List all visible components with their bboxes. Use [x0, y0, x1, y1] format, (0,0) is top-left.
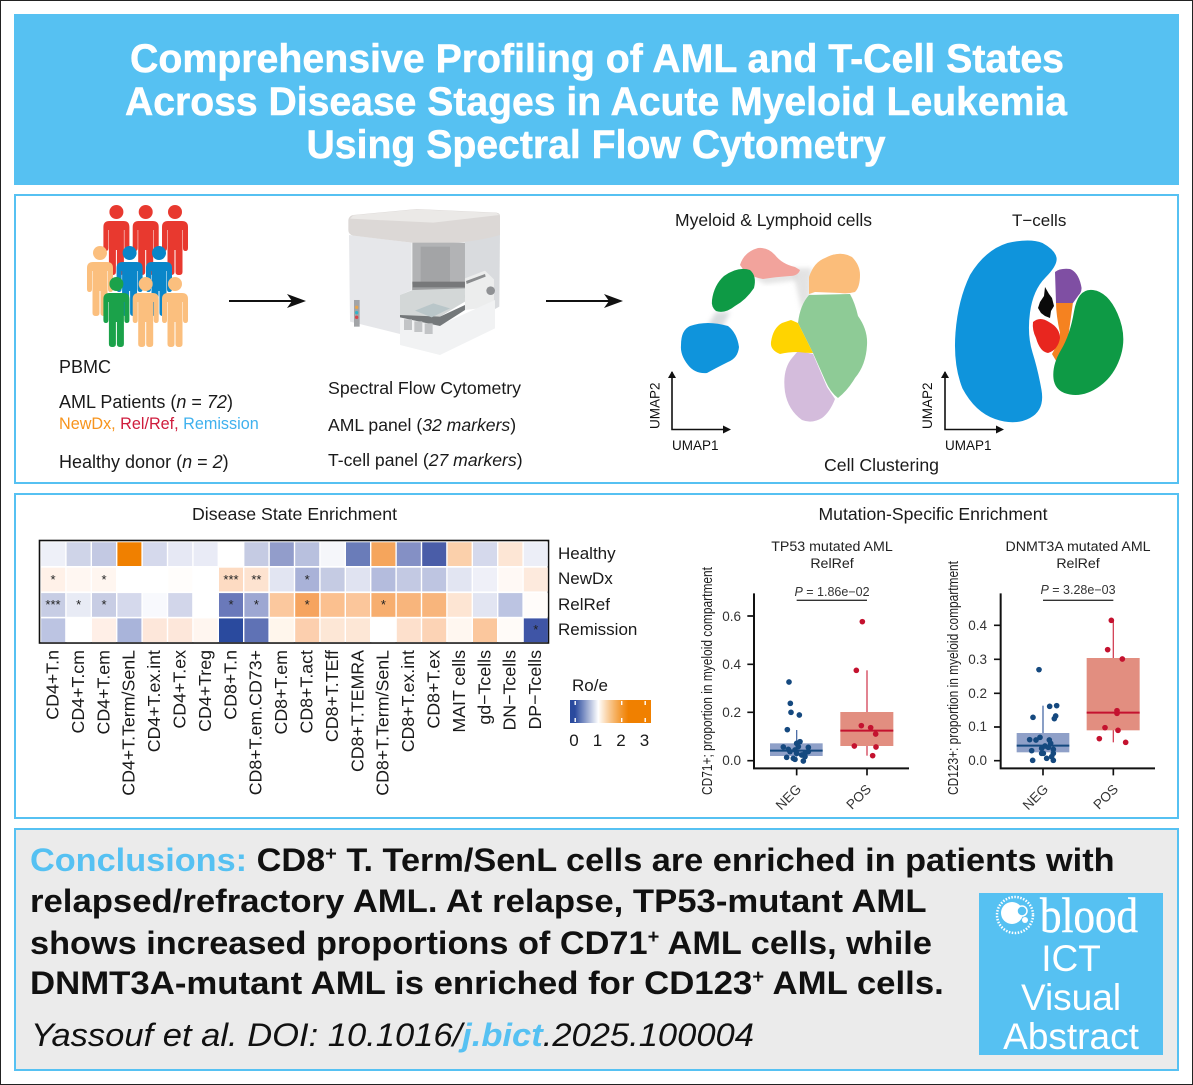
chart: TP53 box plot: 0.2 [722, 705, 741, 720]
column labels: CD4+T.ex.int [144, 650, 164, 752]
text: conclusions: AML cells, while [659, 926, 932, 962]
icon: patient group [87, 205, 188, 347]
text: conclusions [30, 843, 1115, 1002]
legend: Ro/e colour scale: 0 [569, 731, 579, 750]
chart: DNMT3A box plot: P = 3.28e−03 [1040, 583, 1116, 597]
arrow: patients to cytometer [229, 294, 306, 308]
title banner [14, 14, 1179, 185]
text: cytometry panels: AML panel (32 markers) [328, 415, 516, 435]
title banner: Across Disease Stages in Acute Myeloid Leukemia [125, 80, 1068, 124]
column labels: CD8+T.Term/SenL [373, 650, 393, 796]
panel: enrichment analyses [15, 494, 1178, 818]
chart: DNMT3A box plot [945, 539, 1155, 813]
significance stars: * [381, 597, 386, 612]
text: conclusions: DNMT3A-mutant AML is enriched for CD123 [30, 966, 752, 1002]
logo: blood ICT visual abstract: Visual [1021, 977, 1121, 1018]
column labels: CD8+T.TEff [322, 650, 342, 742]
chart: DNMT3A box plot: 0.3 [968, 652, 987, 667]
significance stars: * [76, 597, 81, 612]
column labels: gd−Tcells [474, 650, 494, 725]
column labels: CD8+T.n [220, 650, 240, 720]
text: sample description: PBMC [59, 357, 111, 377]
chart: TP53 box plot: POS [843, 782, 874, 812]
significance stars: * [50, 572, 56, 587]
column labels: CD4+T.ex [170, 650, 190, 729]
legend: Ro/e colour scale: 2 [616, 731, 626, 750]
text: cytometry panels: Spectral Flow Cytometry [328, 378, 521, 398]
chart: T-cells UMAP [955, 240, 1123, 422]
chart: DNMT3A box plot: DNMT3A mutated AML [1005, 539, 1151, 555]
axes: myeloid UMAP: UMAP2 [648, 382, 662, 429]
column labels [42, 650, 545, 796]
column labels: CD4+Treg [195, 650, 215, 732]
significance stars: ** [251, 572, 261, 587]
axes: myeloid UMAP: UMAP1 [672, 438, 719, 453]
column labels: MAIT cells [449, 650, 469, 733]
chart: TP53 box plot: NEG [773, 782, 804, 813]
heading: T-cells UMAP: T−cells [1012, 211, 1066, 230]
significance stars: *** [223, 572, 239, 587]
significance stars: * [254, 597, 259, 612]
chart: TP53 box plot: CD71+; proportion in myeloid compartment [699, 566, 716, 795]
text: citation: Yassouf et al. DOI: 10.1016/j.bict.2025.100004 [31, 1018, 754, 1054]
significance stars: * [533, 622, 538, 637]
text: cytometry panels: T-cell panel (27 markers) [328, 450, 523, 470]
text: cytometry panels [328, 378, 523, 470]
significance stars: * [101, 572, 107, 587]
row labels: Healthy [558, 544, 616, 563]
heading: myeloid and lymphoid UMAP: Myeloid & Lymphoid cells [675, 210, 872, 230]
text: sample description: AML Patients (n = 72) [59, 392, 233, 412]
icon: society seal [997, 897, 1033, 933]
column labels: CD4+T.cm [68, 650, 88, 734]
column labels: CD4+T.n [42, 650, 62, 720]
chart: TP53 box plot: P = 1.86e−02 [794, 585, 870, 599]
row labels [558, 544, 637, 639]
chart: heatmap [40, 540, 548, 643]
chart: TP53 box plot: TP53 mutated AML [771, 539, 893, 555]
title banner: Comprehensive Profiling of AML and T-Cell States [130, 37, 1064, 81]
legend: Ro/e colour scale [569, 676, 651, 750]
text: conclusions: T. Term/SenL cells are enriched in patients with [337, 843, 1115, 879]
text: conclusions: + [648, 926, 659, 948]
column labels: CD8+T.em [271, 650, 291, 734]
legend: Ro/e colour scale: 3 [640, 731, 649, 750]
axes: T-cells UMAP [920, 371, 1004, 453]
significance stars [45, 572, 538, 637]
column labels: CD8+T.act [296, 650, 316, 734]
significance stars: * [305, 572, 310, 587]
axes: T-cells UMAP: UMAP1 [945, 438, 992, 453]
chart: DNMT3A box plot: 0.4 [968, 618, 987, 633]
row labels: Remission [558, 620, 637, 639]
text: conclusions: AML cells. [764, 966, 944, 1002]
text: conclusions: Conclusions: CD8 [30, 843, 325, 879]
chart: DNMT3A box plot: POS [1090, 782, 1121, 812]
chart: TP53 box plot: RelRef [810, 556, 854, 572]
axes: myeloid UMAP [648, 371, 731, 453]
chart: DNMT3A box plot: 0.2 [968, 686, 987, 701]
panel: workflow and cell clustering [15, 195, 1178, 483]
significance stars: * [101, 597, 107, 612]
text: sample description: Healthy donor (n = 2) [59, 452, 229, 472]
chart: DNMT3A box plot: NEG [1020, 782, 1051, 813]
heading: disease state enrichment: Disease State Enrichment [192, 504, 397, 524]
chart: TP53 box plot: 0.4 [722, 657, 741, 672]
text: conclusions: shows increased proportions of CD71 [30, 926, 648, 962]
column labels: DN−Tcells [500, 650, 520, 731]
legend: Ro/e colour scale: Ro/e [572, 676, 608, 695]
caption: cell clustering: Cell Clustering [824, 455, 939, 475]
text: sample description [59, 357, 259, 472]
chart: myeloid and lymphoid UMAP [681, 248, 867, 422]
title banner: Using Spectral Flow Cytometry [306, 123, 886, 167]
chart: TP53 box plot: 0.0 [722, 753, 741, 768]
chart: DNMT3A box plot: 0.1 [968, 719, 987, 734]
text: sample description: NewDx, Rel/Ref, Remission [59, 415, 259, 433]
panel: conclusions [15, 829, 1178, 1070]
significance stars: *** [45, 597, 61, 612]
row labels: NewDx [558, 569, 613, 588]
column labels: CD8+T.em.CD73+ [246, 650, 266, 795]
axes: T-cells UMAP: UMAP2 [920, 382, 935, 429]
icon: spectral flow cytometer [348, 209, 500, 355]
chart: DNMT3A box plot: RelRef [1056, 556, 1100, 572]
arrow: cytometer to clustering [546, 294, 623, 308]
logo: blood ICT visual abstract: Abstract [1003, 1016, 1140, 1057]
chart: TP53 box plot: 0.6 [722, 609, 741, 624]
column labels: CD4+T.Term/SenL [119, 650, 139, 796]
column labels: CD4+T.em [93, 650, 113, 734]
chart: TP53 box plot [699, 539, 909, 813]
heading: mutation-specific enrichment: Mutation-Specific Enrichment [818, 504, 1048, 524]
text: conclusions: + [325, 843, 337, 865]
row labels: RelRef [558, 595, 610, 614]
logo: blood ICT visual abstract: ICT [1041, 938, 1101, 979]
text: conclusions: + [752, 967, 764, 988]
column labels: CD8+T.ex [424, 650, 444, 729]
chart: DNMT3A box plot: CD123+: proportion in myeloid compartment [945, 560, 962, 795]
text: conclusions: relapsed/refractory AML. At relapse, TP53-mutant AML [30, 884, 927, 920]
chart: DNMT3A box plot: 0.0 [968, 753, 987, 768]
significance stars: * [228, 597, 234, 612]
logo: blood ICT visual abstract [979, 887, 1163, 1057]
legend: Ro/e colour scale: 1 [593, 731, 602, 750]
column labels: CD8+T.ex.int [398, 650, 418, 752]
column labels: CD8+T.TEMRA [347, 650, 367, 772]
significance stars: * [305, 597, 310, 612]
column labels: DP−Tcells [525, 650, 545, 730]
logo: blood ICT visual abstract: blood [1040, 887, 1138, 943]
